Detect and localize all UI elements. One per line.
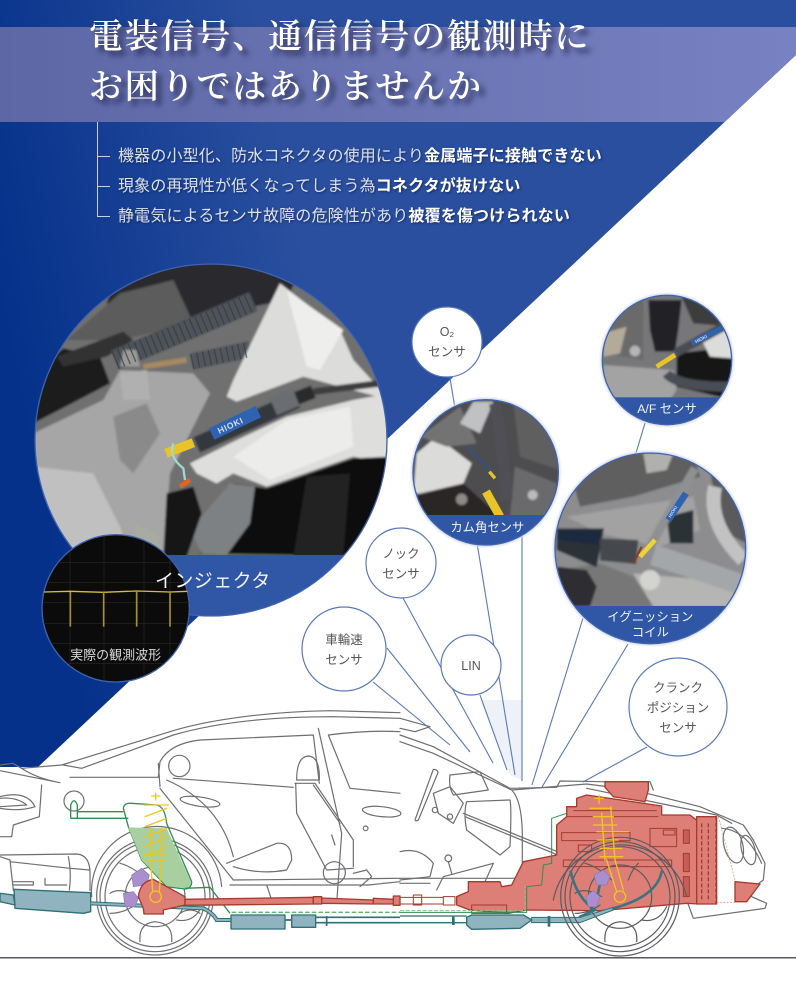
car cutaway: front half: [400, 718, 767, 956]
title: お困りではありませんか: [89, 69, 483, 106]
problem list: 現象の再現性が低くなってしまう為コネクタが抜けない: [118, 176, 521, 195]
sensor bubble: crank position: センサ: [659, 721, 697, 735]
blue diagonal background: [0, 0, 796, 767]
sensor bubble: wheel speed: センサ: [325, 653, 363, 667]
ignition coil photo: イグニッション: [607, 610, 693, 624]
dashed green line: [232, 910, 400, 914]
ignition coil photo: コイル: [632, 626, 669, 640]
sensor bubble: wheel speed: [302, 607, 386, 691]
title: 電装信号、通信信号の観測時に: [89, 18, 590, 56]
sensor bubble: crank position: クランク: [653, 681, 703, 695]
problem list: [98, 122, 602, 225]
purple mounts: [123, 868, 149, 907]
sensor bubble: O2: [412, 307, 482, 377]
front spring strut: [590, 795, 628, 902]
sensor bubble: O2: O₂: [440, 325, 454, 339]
green dashed line: [400, 813, 567, 912]
fuel filler and tank: [71, 801, 230, 913]
waveform inset: [42, 535, 190, 682]
sensor bubble: LIN: LIN: [461, 659, 481, 673]
front purple mounts: [586, 870, 610, 907]
sensor bubble: knock: ノック: [382, 547, 420, 561]
front body outline: [400, 718, 767, 918]
problem list: 静電気によるセンサ故障の危険性があり被覆を傷つけられない: [118, 207, 570, 225]
front wheel: [553, 837, 687, 956]
differential and propeller shaft: [138, 879, 400, 914]
cam angle sensor photo: [410, 397, 560, 548]
rear body outline: [0, 711, 401, 903]
rear wheel: [91, 826, 222, 955]
orange dashed bumper line and front red part: [717, 817, 760, 903]
ignition coil photo: HIOKI: [667, 505, 678, 519]
leader lines: [373, 378, 647, 787]
sensor bubble: knock: センサ: [382, 567, 420, 581]
sensor bubble: O2: センサ: [428, 345, 466, 359]
sensor bubble: wheel speed: 車輪速: [325, 633, 363, 647]
title: [89, 18, 590, 106]
rear muffler and exhaust: [0, 889, 400, 929]
A/F sensor photo: HIOKI: [694, 334, 708, 344]
A/F sensor photo: A/F センサ: [637, 402, 697, 416]
injector photo circle: [33, 263, 390, 622]
sensor bubble: knock: [366, 528, 436, 598]
waveform inset: 実際の観測波形: [70, 647, 161, 662]
car cutaway: rear half: [0, 711, 401, 955]
catalyst and exhaust: [400, 907, 613, 929]
cam angle sensor photo: カム角センサ: [450, 521, 524, 535]
injector caption: インジェクタ: [155, 570, 271, 592]
ignition coil photo: [553, 450, 748, 646]
sensor bubble: crank position: ポジション: [647, 701, 709, 715]
engine bay red block: [400, 782, 717, 913]
sensor bubble: LIN: [441, 635, 501, 695]
ground line: [0, 957, 796, 958]
A/F sensor photo: [600, 293, 734, 431]
injector photo circle: HIOKI: [216, 415, 245, 436]
sensor bubble: crank position: [629, 658, 727, 756]
rear spring strut: [143, 793, 168, 902]
front suspension arms: [571, 872, 662, 917]
problem list: 機器の小型化、防水コネクタの使用により金属端子に接触できない: [118, 146, 602, 165]
